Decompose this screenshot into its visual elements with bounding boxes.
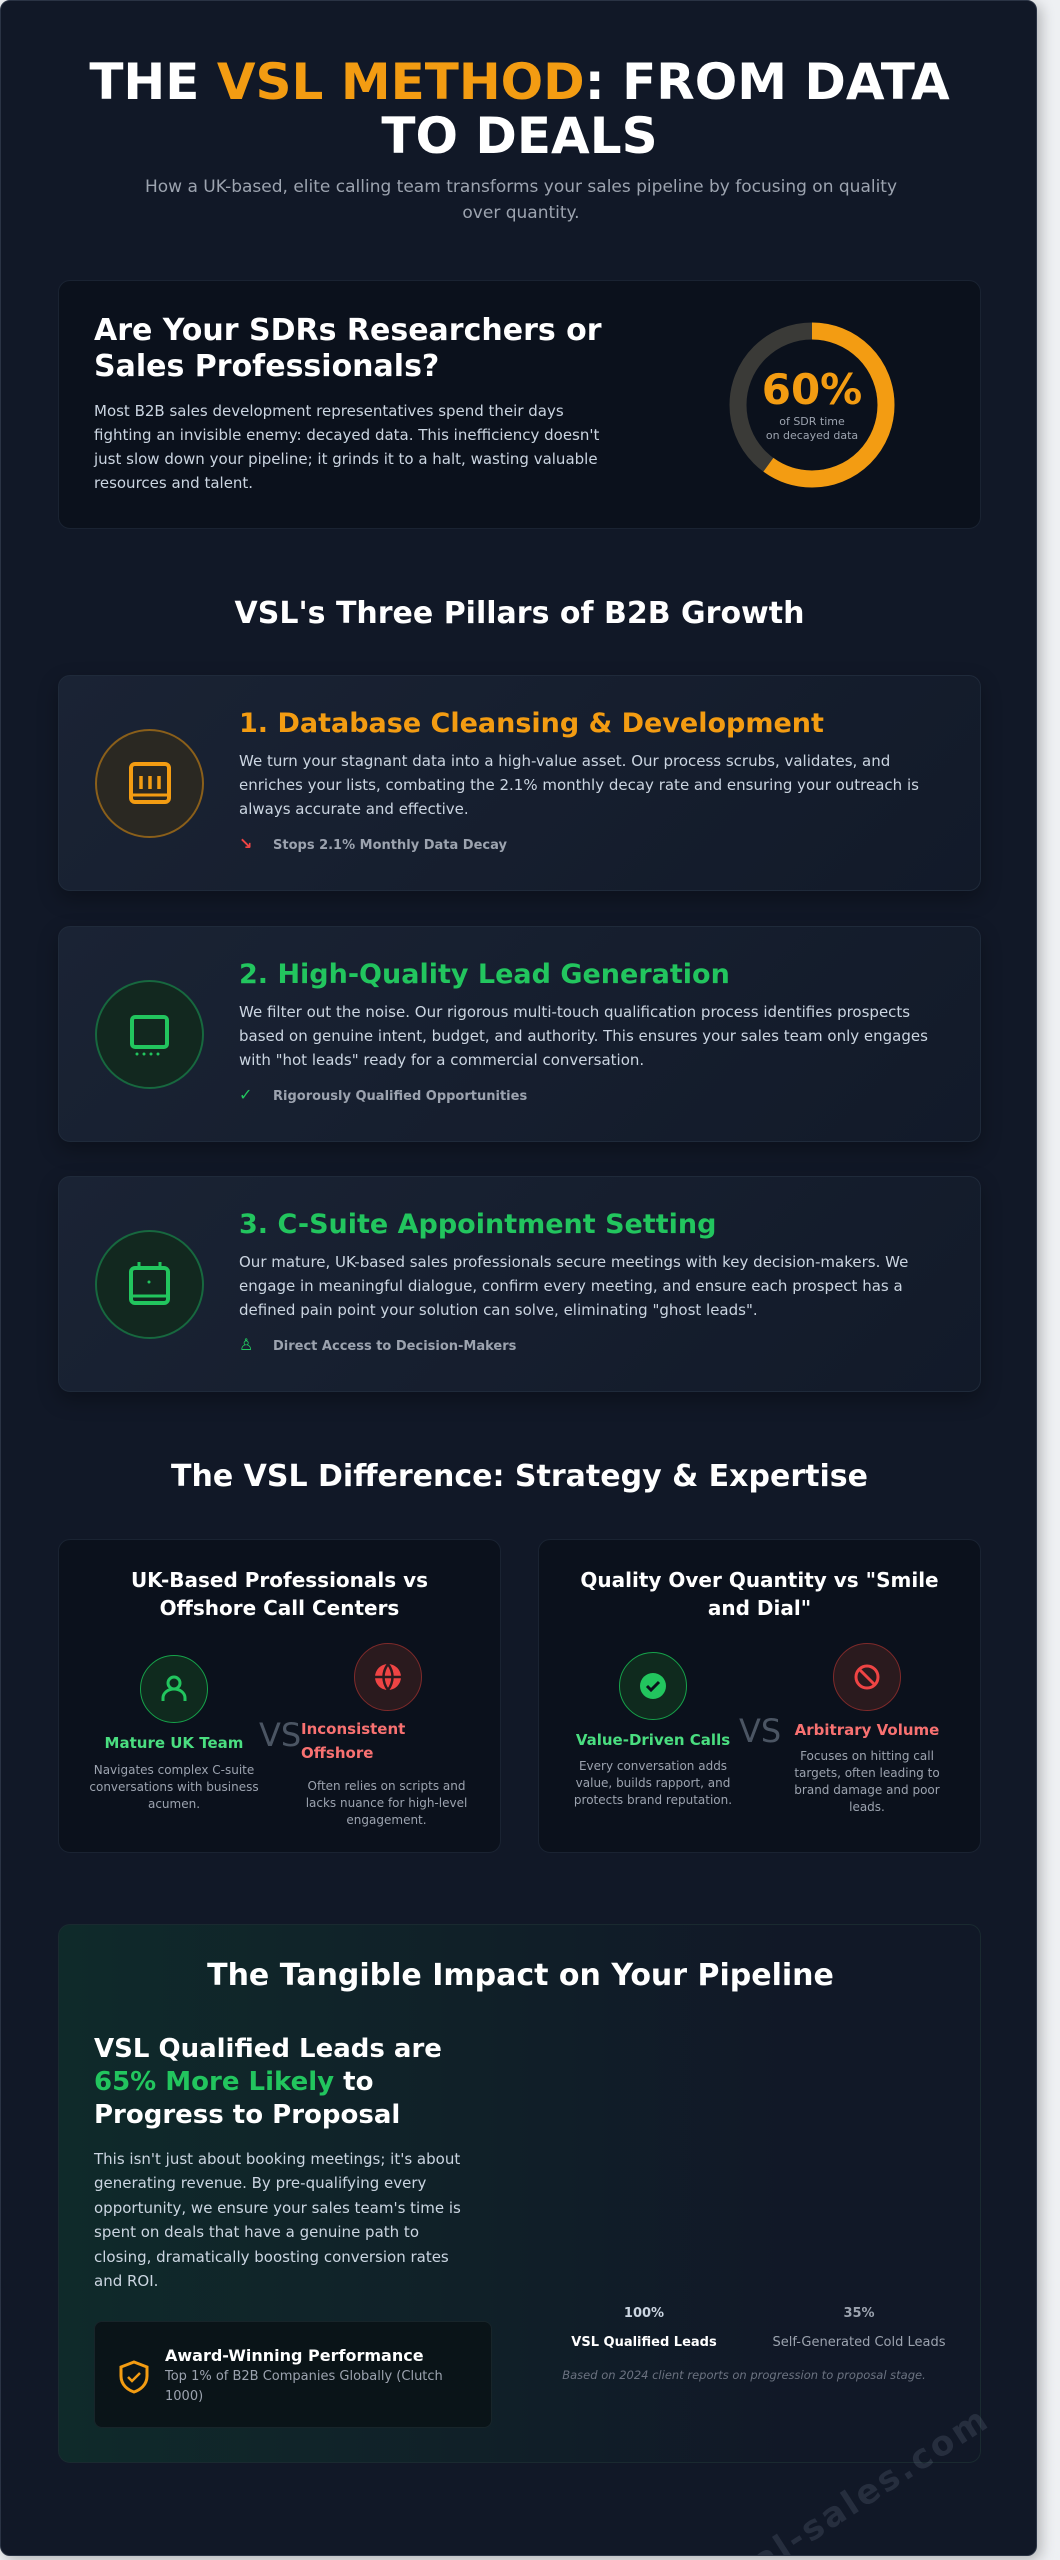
chart: conversion comparison [562, 2306, 946, 2382]
tag: qualified [239, 1085, 527, 1104]
pillar 3 text: Our mature, UK-based sales professionals secure meetings with key decision-makers. We engage in meaningful dialogue, confirm every meeting, and ensure each prospect has a defined pain point your solution can solve, eliminating "ghost leads". [239, 1253, 908, 1319]
pillar 3 heading: 3. C-Suite Appointment Setting [239, 1209, 716, 1240]
tag: qualified: ✓ [239, 1085, 252, 1104]
icon: shield [120, 2360, 148, 2394]
text: Focuses on hitting call targets, often leading to brand damage and poor leads. [794, 1749, 940, 1814]
tag: access: ♙ [239, 1335, 253, 1354]
label: Value-Driven Calls: Value-Driven Calls [576, 1731, 730, 1749]
card title [131, 1568, 428, 1620]
text: impact paragraph: This isn't just about booking meetings; it's about generating revenue. By pre-qualifying every opportunity, we ensure your sales team's time is spent on deals that have a genuine path to closing, dramatically boosting conversion rates and ROI. [94, 2150, 461, 2290]
award text: Top 1% of B2B Companies Globally (Clutch 1000) [165, 2369, 443, 2404]
card title: Quality Over Quantity vs "Smile [580, 1568, 939, 1592]
award text: Award-Winning Performance [165, 2346, 424, 2365]
panel: quality vs quantity [538, 1539, 981, 1853]
pillar 1 heading: 1. Database Cleansing & Development [239, 708, 824, 739]
text: SDR paragraph: Most B2B sales development representatives spend their days fighting an invisible enemy: decayed data. This inefficiency doesn't just slow down your pipeline; it grinds it to a halt, wasting valuable resources and talent. [94, 402, 599, 492]
label: Inconsistent Offshore: Inconsistent Offshore [301, 1720, 405, 1762]
tag: access [239, 1335, 516, 1354]
chart: conversion comparison: 35% [843, 2306, 875, 2321]
card title: UK-Based Professionals vs [131, 1568, 428, 1592]
panel: pillar 3 [58, 1176, 981, 1392]
chart: conversion comparison: VSL Qualified Leads [571, 2335, 717, 2350]
icon: offshore [354, 1643, 422, 1711]
heading: SDRs: Are Your SDRs Researchers or Sales Professionals? [94, 313, 602, 384]
subtitle: How a UK-based, elite calling team transforms your sales pipeline by focusing on quality over quantity. [145, 177, 897, 223]
label: Arbitrary Volume: Arbitrary Volume [795, 1721, 939, 1739]
tag: access: Direct Access to Decision-Makers [273, 1339, 516, 1354]
pillar 1 text: We turn your stagnant data into a high-value asset. Our process scrubs, validates, and enriches your lists, combating the 2.1% monthly decay rate and ensuring your outreach is always accurate and effective. [239, 752, 919, 818]
title: TO DEALS [381, 107, 658, 165]
chart: 60% donut [730, 322, 894, 488]
chart: conversion comparison: Self-Generated Cold Leads [772, 2335, 946, 2350]
label: Mature UK Team: Mature UK Team [105, 1734, 243, 1752]
vs: VS [259, 1716, 301, 1754]
card title [580, 1568, 939, 1620]
chart: 60% donut: 60% [762, 365, 862, 414]
card title: Offshore Call Centers [160, 1596, 399, 1620]
vs: VS [739, 1712, 781, 1750]
heading: difference: The VSL Difference: Strategy & Expertise [171, 1459, 868, 1494]
text: Every conversation adds value, builds rapport, and protects brand reputation. [574, 1759, 732, 1807]
panel: SDR problem [58, 280, 981, 529]
heading: impact: The Tangible Impact on Your Pipeline [207, 1958, 834, 1993]
panel: UK vs offshore [58, 1539, 501, 1853]
text: Often relies on scripts and lacks nuance for high-level engagement. [306, 1779, 467, 1827]
icon: calendar [95, 1230, 204, 1339]
icon: database [95, 729, 204, 838]
heading: 65%: VSL Qualified Leads are 65% More Likely to Progress to Proposal [94, 2034, 442, 2130]
title: THE VSL METHOD: FROM DATA [89, 53, 950, 111]
chart: 60% donut: on decayed data [766, 429, 858, 442]
pillar 2 text: We filter out the noise. Our rigorous multi-touch qualification process identifies prospects based on genuine intent, budget, and authority. This ensures your sales team only engages with "hot leads" ready for a commercial conversation. [239, 1003, 928, 1069]
card title: and Dial" [708, 1596, 811, 1620]
panel: pillar 2 [58, 926, 981, 1142]
tag: decay: ↘ [239, 834, 252, 853]
text: Navigates complex C-suite conversations with business acumen. [89, 1763, 259, 1811]
tag: qualified: Rigorously Qualified Opportunities [273, 1089, 527, 1104]
panel: pillar 1 [58, 675, 981, 891]
pillar 2 heading: 2. High-Quality Lead Generation [239, 959, 730, 990]
panel: impact [58, 1924, 981, 2463]
icon: value [619, 1652, 687, 1720]
title [89, 53, 950, 165]
tag: decay [239, 834, 507, 853]
icon: filter [95, 980, 204, 1089]
callout: award [94, 2321, 492, 2428]
heading: three pillars: VSL's Three Pillars of B2B Growth [235, 596, 804, 631]
chart: conversion comparison: 100% [624, 2306, 664, 2321]
icon: volume [833, 1643, 901, 1711]
chart: conversion comparison: Based on 2024 client reports on progression to proposal stage. [562, 2368, 926, 2382]
tag: decay: Stops 2.1% Monthly Data Decay [273, 838, 507, 853]
award text [164, 2346, 443, 2404]
icon: UK team [140, 1655, 208, 1723]
chart: 60% donut: of SDR time [779, 415, 845, 428]
